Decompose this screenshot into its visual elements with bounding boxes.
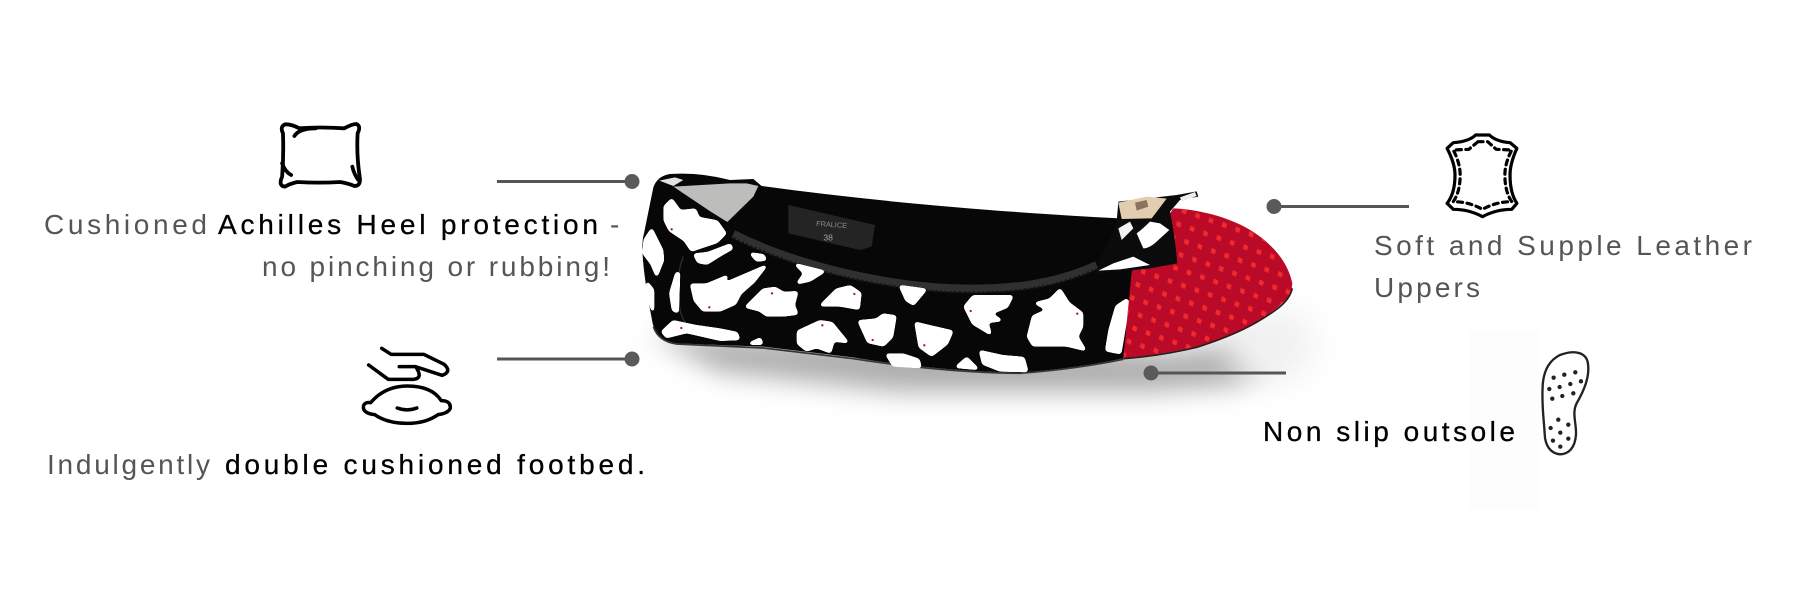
- callout line: leather: [1266, 199, 1409, 214]
- insole label: [788, 205, 875, 250]
- text: achilles heel: Cushioned: [44, 209, 207, 240]
- text: double cushioned: double cushioned footbed.: [225, 449, 645, 480]
- text: leather: [1374, 230, 1752, 303]
- shoe illustration: [642, 174, 1292, 373]
- text: achilles heel: [44, 209, 619, 282]
- insole label: 38: [823, 233, 833, 243]
- bow: [1097, 191, 1198, 274]
- callout line: footbed: [497, 352, 640, 366]
- icon: hand over lemon: [363, 348, 450, 423]
- callout line: heel: [497, 174, 640, 189]
- icon: leather hide: [1447, 135, 1517, 217]
- callout line: outsole: [1144, 366, 1286, 380]
- text: leather: Uppers: [1374, 272, 1480, 303]
- text: double cushioned: Indulgently: [47, 449, 210, 480]
- faint panel behind sole icon: [1470, 330, 1540, 510]
- heel lining: [673, 183, 758, 222]
- icon: sole: [1542, 352, 1588, 454]
- text: achilles heel: no pinching or rubbing!: [262, 251, 610, 282]
- text: outsole: Non slip outsole: [1263, 416, 1515, 447]
- shoe shadow: [650, 307, 1315, 392]
- text: achilles heel: Achilles Heel protection: [218, 209, 598, 240]
- elastic binding: [733, 234, 1097, 289]
- shoe body: [642, 174, 1160, 373]
- red toe cap: [1097, 191, 1292, 359]
- icon: pillow: [281, 124, 360, 187]
- insole label: FRALICE: [816, 219, 847, 230]
- text: achilles heel: -: [610, 209, 619, 240]
- bunny print: [644, 200, 1128, 371]
- text: leather: Soft and Supple Leather: [1374, 230, 1752, 261]
- rabbit eyes: [670, 228, 1078, 346]
